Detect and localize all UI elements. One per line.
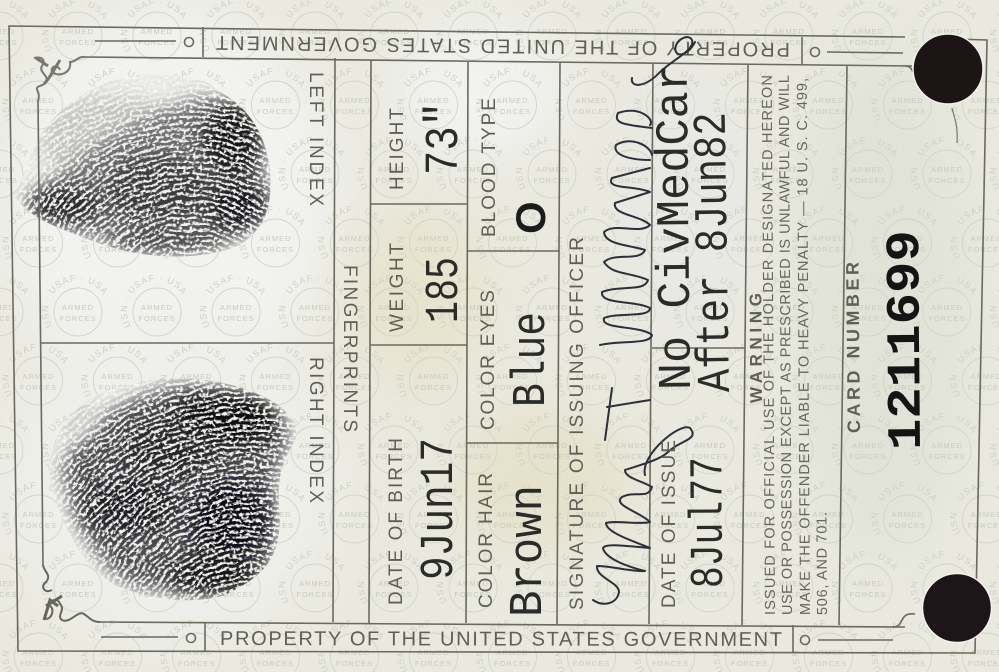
top band: upside-down property text: PROPERTY OF THE UNITED STATES GOVERNMENT — [216, 31, 790, 60]
field: color hair: COLOR HAIR — [476, 473, 497, 608]
field: height: 73" — [419, 102, 472, 175]
field: weight: WEIGHT — [387, 243, 408, 332]
field: card number — [843, 230, 935, 450]
field: color eyes — [478, 290, 559, 430]
field: date of birth: DATE OF BIRTH — [386, 438, 407, 605]
field: height: HEIGHT — [387, 108, 408, 190]
warning block — [746, 75, 831, 615]
field: height — [387, 102, 472, 190]
field: date of issue — [659, 440, 737, 608]
corner ornament: bottom left — [43, 565, 100, 622]
crease mark — [952, 108, 957, 143]
corner ornament: top left — [34, 57, 85, 102]
field: color eyes: COLOR EYES — [478, 290, 499, 430]
field: medical care note: No CivMedCar — [649, 64, 705, 390]
punched hole: bottom right — [922, 574, 992, 642]
label: fingerprints: FINGERPRINTS — [339, 265, 360, 432]
warning block: USE OR POSSESSION EXCEPT AS PRESCRIBED IS UNLAWFUL AND WILL — [777, 75, 796, 615]
label: left index: LEFT INDEX — [305, 72, 326, 206]
warning block: ISSUED FOR OFFICIAL USE OF THE HOLDER DESIGNATED HEREON — [760, 75, 779, 615]
field: date of issue: 8Jul77 — [683, 457, 737, 588]
field: blood type: BLOOD TYPE — [479, 98, 500, 237]
fingerprint: right index — [48, 378, 296, 600]
field: color hair: Brown — [503, 485, 556, 617]
fingerprint: left index — [15, 74, 270, 256]
field: medical care note — [649, 64, 744, 393]
field: date of birth: 9Jun17 — [414, 438, 467, 580]
field: medical care note: After 8Jun82 — [687, 112, 744, 393]
label: right index: RIGHT INDEX — [305, 357, 326, 503]
field: color eyes: Blue — [506, 312, 559, 407]
field: color hair — [476, 473, 556, 617]
label: signature of issuing officer: SIGNATURE OF ISSUING OFFICER — [567, 237, 588, 610]
field: blood type: O — [507, 201, 554, 234]
field: card number: CARD NUMBER — [843, 262, 864, 433]
punched hole: top right — [913, 34, 983, 104]
field: date of issue: DATE OF ISSUE — [659, 440, 680, 608]
field: card number: 1211699 — [879, 230, 935, 450]
warning block: WARNING — [746, 293, 766, 403]
field: date of birth — [386, 438, 467, 605]
field: weight — [387, 243, 472, 332]
bottom band: property text: PROPERTY OF THE UNITED STATES GOVERNMENT — [220, 628, 782, 651]
field: weight: 185 — [419, 257, 472, 323]
signature — [593, 37, 695, 604]
warning block: 506, AND 701. — [814, 512, 831, 615]
warning block: MAKE THE OFFENDER LIABLE TO HEAVY PENALTY — 18 U. S. C. 499, — [795, 78, 814, 615]
field: blood type — [479, 98, 554, 237]
